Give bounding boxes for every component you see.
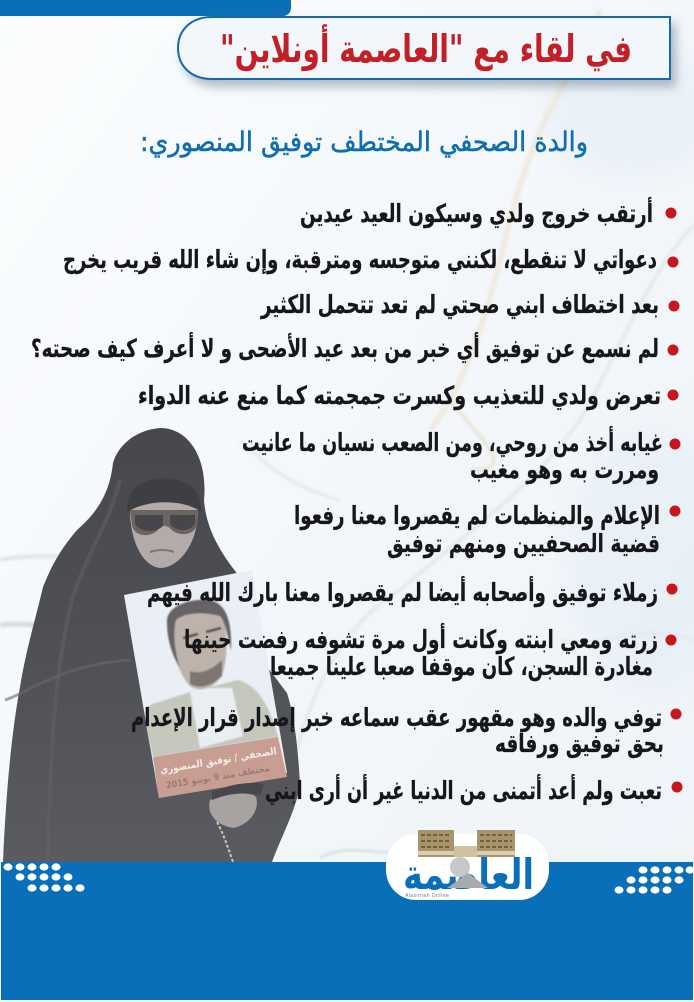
poster <box>124 570 287 798</box>
logo buildings <box>418 830 515 857</box>
dots left <box>4 863 84 892</box>
poster caption band <box>153 737 287 798</box>
top blue tab <box>0 0 291 16</box>
logo open book <box>447 873 488 888</box>
logo <box>386 830 549 900</box>
face <box>127 478 201 568</box>
photo: mother holding her son's portrait: الصحفي / توفيق المنصوري <box>159 746 277 776</box>
photo: mother holding her son's portrait: مختطف منذ 9 يونيو 2015 <box>165 764 270 791</box>
portrait of the journalist <box>146 600 278 757</box>
quote list <box>31 197 682 806</box>
abaya <box>3 428 300 862</box>
quote 9 <box>184 623 676 682</box>
hand and rosary <box>209 794 257 828</box>
logo wordmark: العاصمة <box>403 850 534 899</box>
dots right <box>614 866 694 894</box>
quote 10 <box>131 703 682 759</box>
quote 6 <box>242 426 680 485</box>
quote 7 <box>294 501 680 559</box>
photo: mother holding her son's portrait <box>3 428 300 862</box>
subtitle: والدة الصحفي المختطف توفيق المنصوري: <box>140 127 588 158</box>
logo caption: Alasimah Online <box>405 893 449 899</box>
footer blue band <box>1 862 693 1000</box>
title box <box>178 17 670 79</box>
logo globe <box>450 857 470 877</box>
